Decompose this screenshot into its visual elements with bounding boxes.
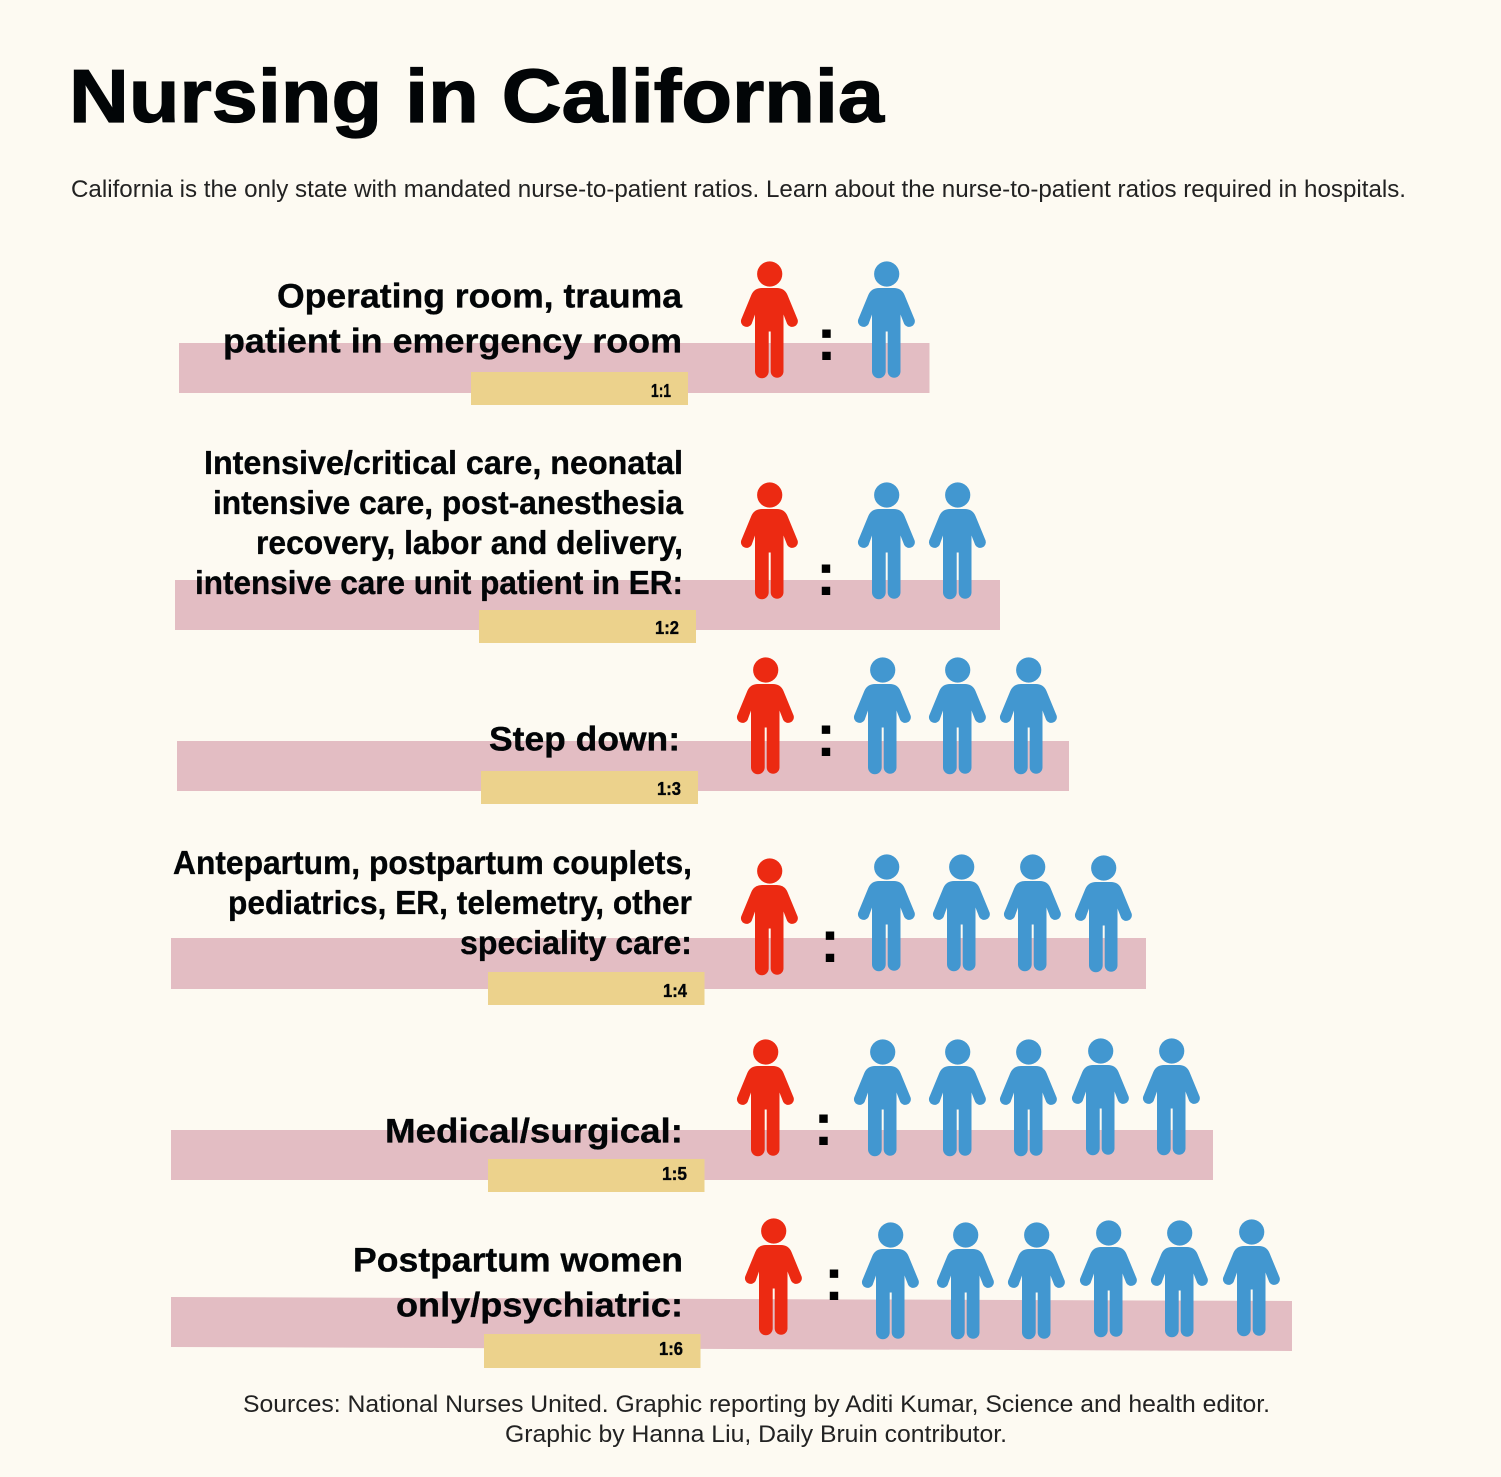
icon: nurse: [745, 1218, 802, 1335]
category label: Operating room, trauma: [277, 278, 683, 316]
yellow ratio tag: [479, 610, 696, 643]
category label: Medical/surgical:: [385, 1112, 683, 1150]
row: 1 to 1 ratio: [179, 261, 930, 405]
title: Nursing in California: [69, 54, 885, 138]
colon: :: [816, 702, 836, 769]
source credits: Graphic by Hanna Liu, Daily Bruin contributor.: [505, 1421, 1007, 1448]
icons: patients: [858, 261, 915, 378]
yellow ratio tag: [481, 771, 698, 804]
pink bar: [179, 343, 930, 393]
category label: only/psychiatric:: [396, 1286, 683, 1324]
subtitle: California is the only state with mandated nurse-to-patient ratios. Learn about the nurse-to-patient ratios required in hospitals.: [71, 176, 1406, 203]
ratio label: 1:2: [655, 618, 679, 638]
category label: intensive care, post-anesthesia: [213, 484, 684, 521]
category label: [195, 444, 684, 601]
pink bar: [175, 580, 1000, 630]
icon: nurse: [737, 1039, 794, 1156]
category label: [353, 1242, 683, 1324]
row: 1 to 2 ratio: [175, 444, 1000, 643]
yellow ratio tag: [488, 1159, 704, 1192]
category label: [173, 844, 692, 961]
icon: nurse: [737, 657, 794, 774]
icon: nurse: [741, 261, 798, 378]
pink bar: [177, 741, 1069, 791]
icons: patients: [858, 482, 986, 599]
source credits: Sources: National Nurses United. Graphic reporting by Aditi Kumar, Science and health editor.: [243, 1391, 1270, 1418]
row: 1 to 6 ratio: [171, 1218, 1292, 1368]
yellow ratio tag: [488, 972, 704, 1005]
colon: :: [824, 1246, 844, 1313]
pink bar: [171, 938, 1146, 989]
ratio label: 1:1: [651, 381, 671, 401]
row: 1 to 5 ratio: [171, 1038, 1213, 1192]
icons: patients: [862, 1219, 1280, 1339]
ratio label: 1:5: [662, 1164, 687, 1184]
row: 1 to 4 ratio: [171, 844, 1146, 1005]
category label: recovery, labor and delivery,: [256, 524, 683, 561]
category label: pediatrics, ER, telemetry, other: [228, 884, 692, 921]
category label: Step down:: [489, 720, 680, 758]
colon: :: [820, 908, 840, 975]
pink bar: [171, 1130, 1213, 1180]
yellow ratio tag: [484, 1334, 700, 1368]
colon: :: [814, 1091, 833, 1158]
category label: Antepartum, postpartum couplets,: [173, 844, 692, 881]
ratio label: 1:4: [663, 981, 687, 1001]
category label: intensive care unit patient in ER:: [195, 564, 683, 601]
ratio label: 1:3: [657, 779, 681, 799]
pink bar: [171, 1297, 1292, 1351]
icons: patients: [854, 1038, 1200, 1156]
category label: patient in emergency room: [223, 322, 682, 360]
icon: nurse: [741, 482, 798, 599]
colon: :: [817, 306, 836, 373]
category label: Intensive/critical care, neonatal: [204, 444, 683, 481]
colon: :: [816, 541, 836, 608]
category label: Postpartum women: [353, 1242, 683, 1280]
yellow ratio tag: [471, 372, 688, 405]
icon: nurse: [741, 858, 798, 975]
category label: [223, 278, 683, 360]
row: 1 to 3 ratio: [177, 657, 1069, 804]
category label: speciality care:: [460, 924, 692, 961]
source credits: [243, 1391, 1270, 1448]
icons: patients: [854, 657, 1057, 774]
ratio label: 1:6: [659, 1339, 683, 1359]
icons: patients: [858, 854, 1132, 972]
